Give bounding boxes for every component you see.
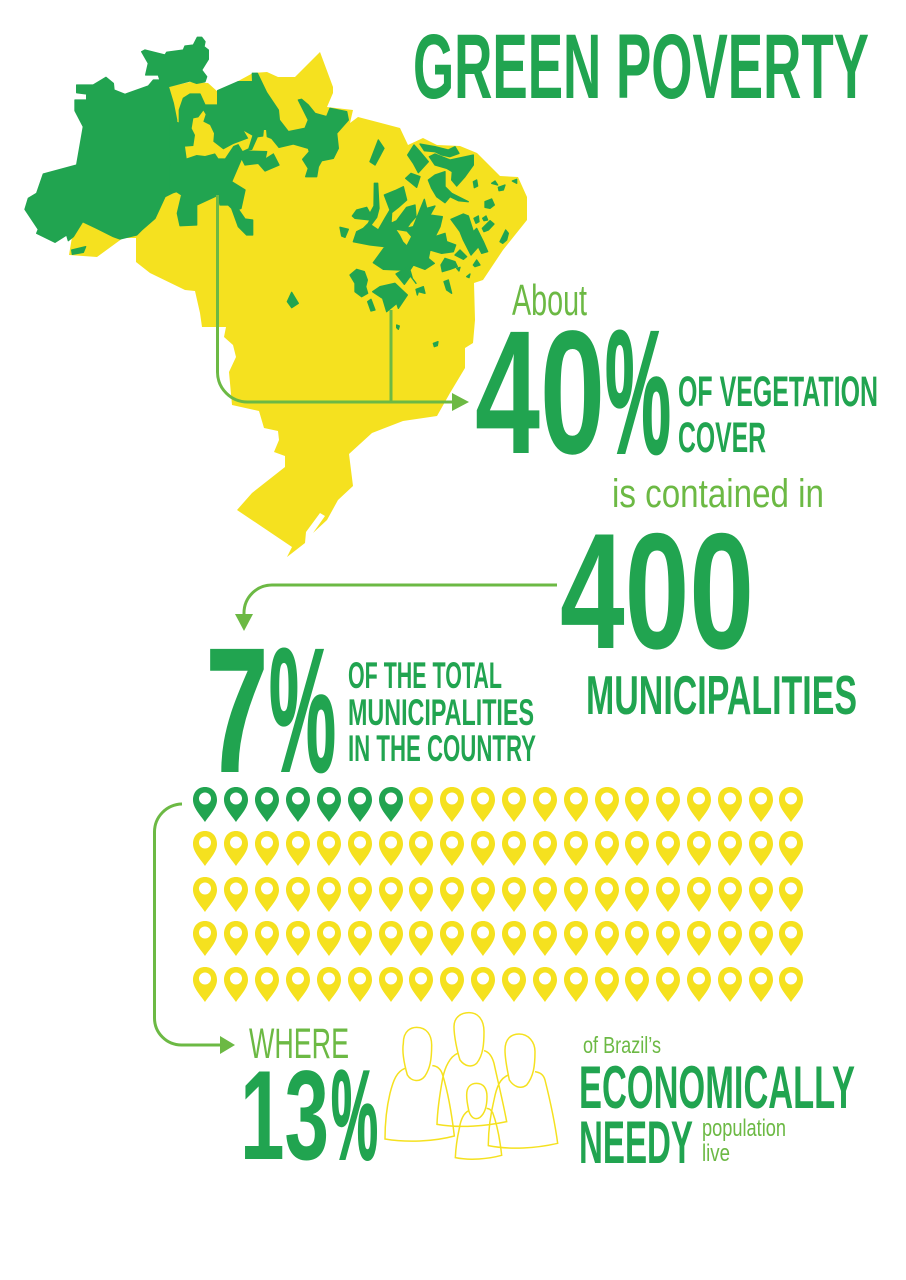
text: of vegetation cover: COVER xyxy=(678,414,766,462)
text: of the total municipalities in the country: MUNICIPALITIES xyxy=(348,692,534,733)
text: of vegetation cover xyxy=(678,368,878,462)
text: is contained in: is contained in xyxy=(612,472,824,516)
pin grid: 7 percent of 100 pins green xyxy=(193,787,803,1002)
text: population live xyxy=(702,1115,786,1167)
text: of the total municipalities in the country xyxy=(348,655,536,769)
map: scattered north-eastern green areas xyxy=(340,140,517,312)
text: % xyxy=(269,613,336,809)
text: About: About xyxy=(512,276,587,325)
text: economically needy: NEEDY xyxy=(579,1109,693,1176)
text: where: WHERE xyxy=(249,1020,349,1068)
stat: 40 percent: 40 xyxy=(475,295,605,491)
stat: 7 percent: 7 xyxy=(206,613,268,809)
text: economically needy xyxy=(579,1054,855,1176)
stat: 400: 400 xyxy=(560,499,754,683)
text: population live: live xyxy=(702,1140,730,1167)
stat: 13 percent: 13 xyxy=(240,1044,329,1186)
text: of Brazil's: of Brazil’s xyxy=(583,1032,661,1058)
icon: group of people outlines xyxy=(385,1013,558,1159)
text: of the total municipalities in the country: OF THE TOTAL xyxy=(348,655,502,696)
map of Brazil xyxy=(25,37,527,557)
map: small isolated green spots xyxy=(287,292,438,347)
text: of the total municipalities in the country: IN THE COUNTRY xyxy=(348,728,536,769)
arrow: from pin grid to 13 percent xyxy=(154,804,235,1054)
arrow: from map to 40 percent xyxy=(218,195,469,411)
text: % xyxy=(331,1044,378,1186)
map base: yellow country shape xyxy=(69,52,527,557)
map: central northern green area xyxy=(170,73,348,235)
text: population live: population xyxy=(702,1115,786,1142)
arrow: from 400 to 7 percent xyxy=(235,585,557,631)
text: % xyxy=(605,295,671,491)
map: north-western green area xyxy=(25,37,208,254)
